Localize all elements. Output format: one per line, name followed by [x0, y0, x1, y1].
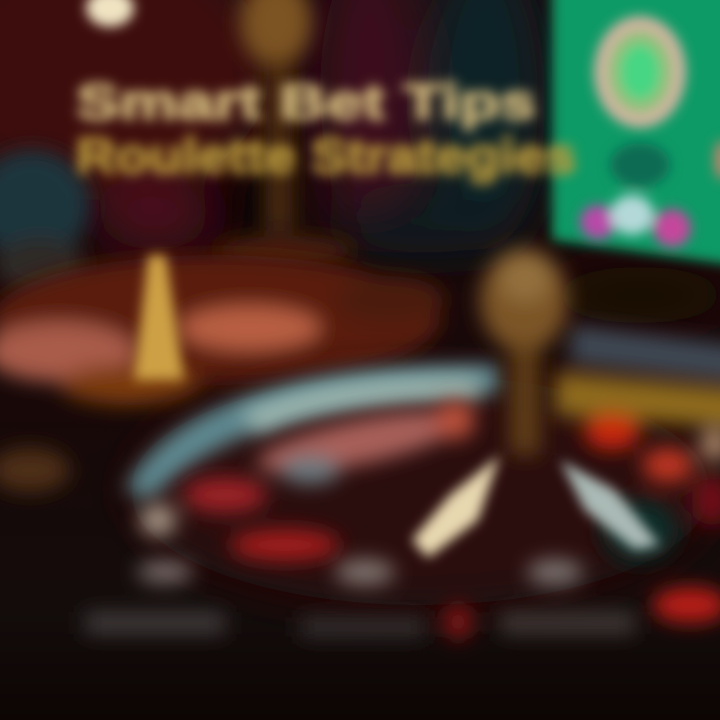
gold trophy stand in background [215, 0, 355, 264]
main roulette wheel [125, 365, 710, 605]
white blade left [412, 455, 500, 558]
gold cone pointer [134, 255, 184, 380]
white blade right [560, 460, 660, 550]
title: Roulette Strategies [76, 128, 576, 184]
title: Smart Bet Tips [76, 74, 536, 130]
top lamp glow [86, 0, 134, 27]
teal globe at left [0, 150, 90, 293]
brass spindle [480, 248, 568, 455]
left table edge glow [0, 448, 70, 492]
wheel pockets [140, 399, 475, 561]
wheel rim [125, 365, 500, 500]
right side wheel [555, 325, 720, 623]
green screen panel [552, 0, 720, 270]
bottom betting labels [85, 559, 635, 640]
screen lower markers [580, 140, 720, 247]
screen target ring [594, 16, 686, 128]
background: curtains [0, 0, 720, 323]
title [76, 74, 576, 184]
back roulette table [0, 255, 445, 405]
